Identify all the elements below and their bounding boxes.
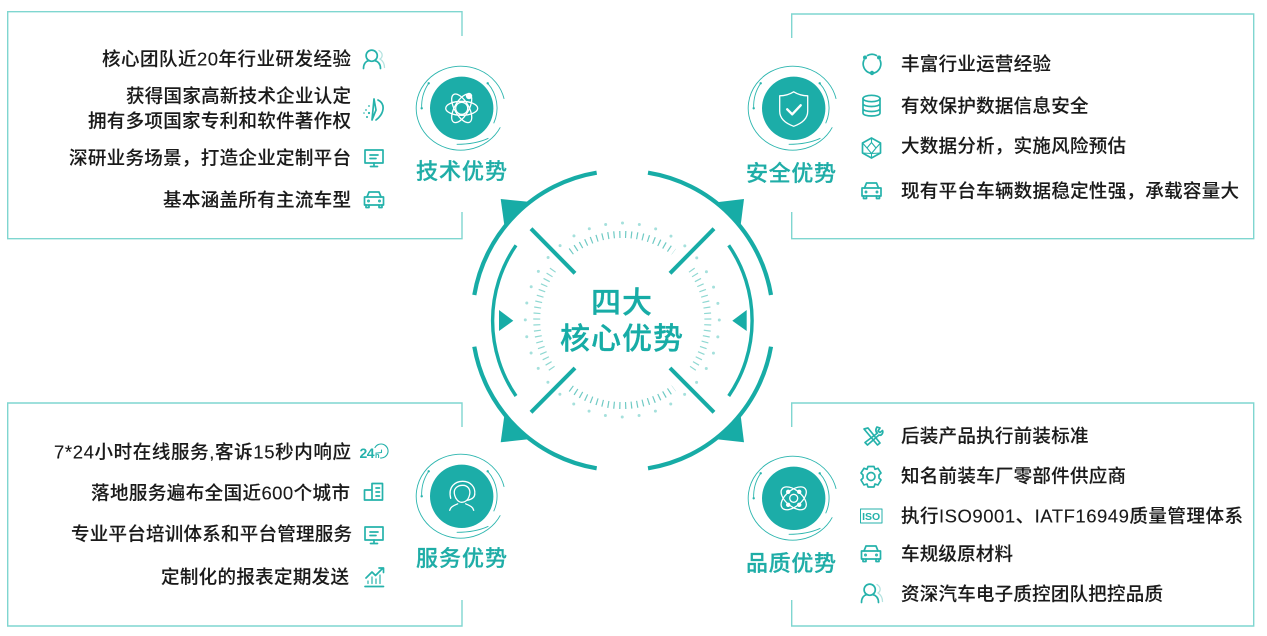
icon: tools	[864, 427, 883, 445]
panel: 服务优势 frame	[8, 403, 462, 626]
item: 定制平台: 深研业务场景，打造企业定制平台	[69, 148, 351, 168]
icon: team	[862, 584, 882, 602]
list: 服务优势	[54, 442, 388, 588]
item: 车型覆盖: 基本涵盖所有主流车型	[163, 190, 351, 210]
item: 在线服务: 7*24小时在线服务,客诉15秒内响应	[54, 442, 351, 462]
icon: hex network	[862, 138, 880, 158]
icon: quality atom	[777, 483, 810, 514]
corner triangles	[501, 199, 744, 442]
list: 安全优势	[862, 54, 1239, 202]
item: 培训体系: 专业平台培训体系和平台管理服务	[71, 524, 352, 544]
icon: shield	[780, 92, 808, 126]
icon: growth chart	[365, 568, 384, 586]
badge: 服务优势	[416, 454, 504, 538]
center title	[560, 287, 683, 356]
item: 运营经验: 丰富行业运营经验	[901, 54, 1051, 74]
diagonal lines	[531, 229, 714, 412]
icon: gear	[861, 466, 881, 487]
tick marks ring	[537, 234, 708, 406]
icon: cycle	[863, 54, 881, 75]
list: 技术优势	[69, 48, 384, 210]
item: 数据安全: 有效保护数据信息安全	[901, 96, 1089, 116]
item: 专利和软著: 拥有多项国家专利和软件著作权	[88, 110, 351, 132]
item: 质控团队: 资深汽车电子质控团队把控品质	[901, 584, 1163, 604]
heading: 安全优势: 安全优势	[746, 161, 836, 186]
center title: 四大	[591, 287, 652, 320]
item: 前装标准: 后装产品执行前装标准	[901, 426, 1088, 446]
panel: 技术优势 frame	[8, 12, 462, 239]
list: 品质优势	[860, 426, 1243, 604]
badge: 技术优势	[416, 66, 504, 150]
badge: 品质优势	[748, 456, 836, 540]
item: 原材料: 车规级原材料	[901, 544, 1013, 564]
icon: car	[862, 546, 880, 562]
dotted ring	[525, 223, 719, 417]
item: 定制报表: 定制化的报表定期发送	[161, 566, 349, 588]
icon: monitor	[365, 527, 383, 544]
icon: car	[364, 192, 384, 208]
icon: 24h clock: 24	[360, 445, 375, 461]
heading: 品质优势: 品质优势	[746, 551, 836, 576]
icon: ISO badge: ISO	[862, 511, 880, 523]
center title: 核心优势	[560, 323, 683, 356]
heading: 技术优势: 技术优势	[416, 159, 507, 184]
inner arcs	[493, 245, 752, 396]
item: 服务网点: 落地服务遍布全国近600个城市	[91, 482, 350, 504]
icon: team	[364, 50, 384, 68]
icon: car	[862, 183, 881, 198]
outer arcs	[474, 173, 771, 468]
panel: 品质优势 frame	[792, 403, 1254, 626]
item: 质量体系: 执行ISO9001、IATF16949质量管理体系	[901, 506, 1243, 526]
icon: 24h clock: h	[375, 451, 380, 460]
icon: headset agent	[450, 481, 475, 510]
side triangles	[499, 310, 747, 331]
badge: 安全优势	[748, 66, 836, 150]
icon: 24h clock	[360, 444, 388, 461]
item: 供应商: 知名前装车厂零部件供应商	[901, 466, 1126, 486]
item: 高新技术企业: 获得国家高新技术企业认定	[126, 86, 351, 106]
item: 团队经验: 核心团队近20年行业研发经验	[102, 48, 351, 70]
icon: buildings	[364, 484, 382, 500]
item: 风险预估: 大数据分析，实施风险预估	[901, 136, 1126, 156]
icon: monitor	[365, 150, 383, 166]
item: 平台稳定: 现有平台车辆数据稳定性强，承载容量大	[901, 180, 1239, 202]
panel: 安全优势 frame	[792, 14, 1254, 239]
central radial diagram	[474, 173, 771, 468]
icon: patent	[363, 99, 383, 120]
heading: 服务优势: 服务优势	[416, 546, 507, 571]
icon: atom	[446, 91, 478, 126]
icon: database	[863, 95, 880, 116]
